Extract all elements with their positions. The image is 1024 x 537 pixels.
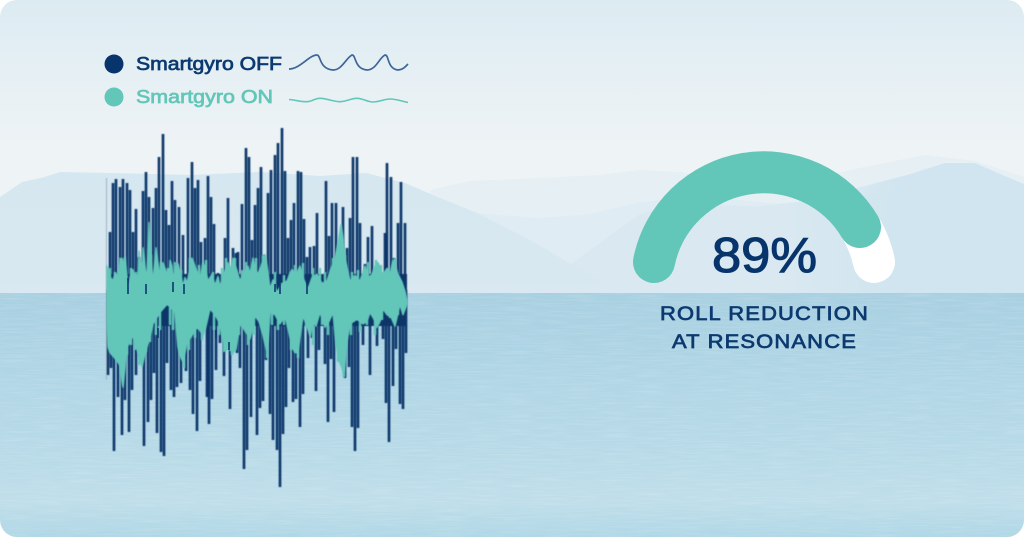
legend (104, 53, 408, 107)
legend item: Smartgyro OFF: Smartgyro OFF (136, 53, 282, 74)
waveform: Smartgyro OFF (106, 128, 407, 487)
legend item: Smartgyro OFF (104, 53, 408, 74)
gauge value: 89% (712, 229, 817, 283)
background: sky and mountains (0, 0, 1024, 294)
legend item: Smartgyro ON: Smartgyro ON (136, 86, 273, 107)
gauge caption: ROLL REDUCTION (660, 304, 869, 325)
legend item: Smartgyro ON (104, 86, 408, 107)
gauge fill: 89% (654, 172, 860, 262)
background: sea (0, 293, 1024, 537)
waveform: Smartgyro ON (107, 223, 407, 387)
gauge caption (660, 304, 869, 353)
chart: roll waveform (106, 128, 407, 487)
waveform core details (128, 278, 307, 350)
gauge (654, 172, 874, 353)
gauge caption: AT RESONANCE (672, 332, 857, 353)
gauge track: remaining (860, 227, 874, 262)
